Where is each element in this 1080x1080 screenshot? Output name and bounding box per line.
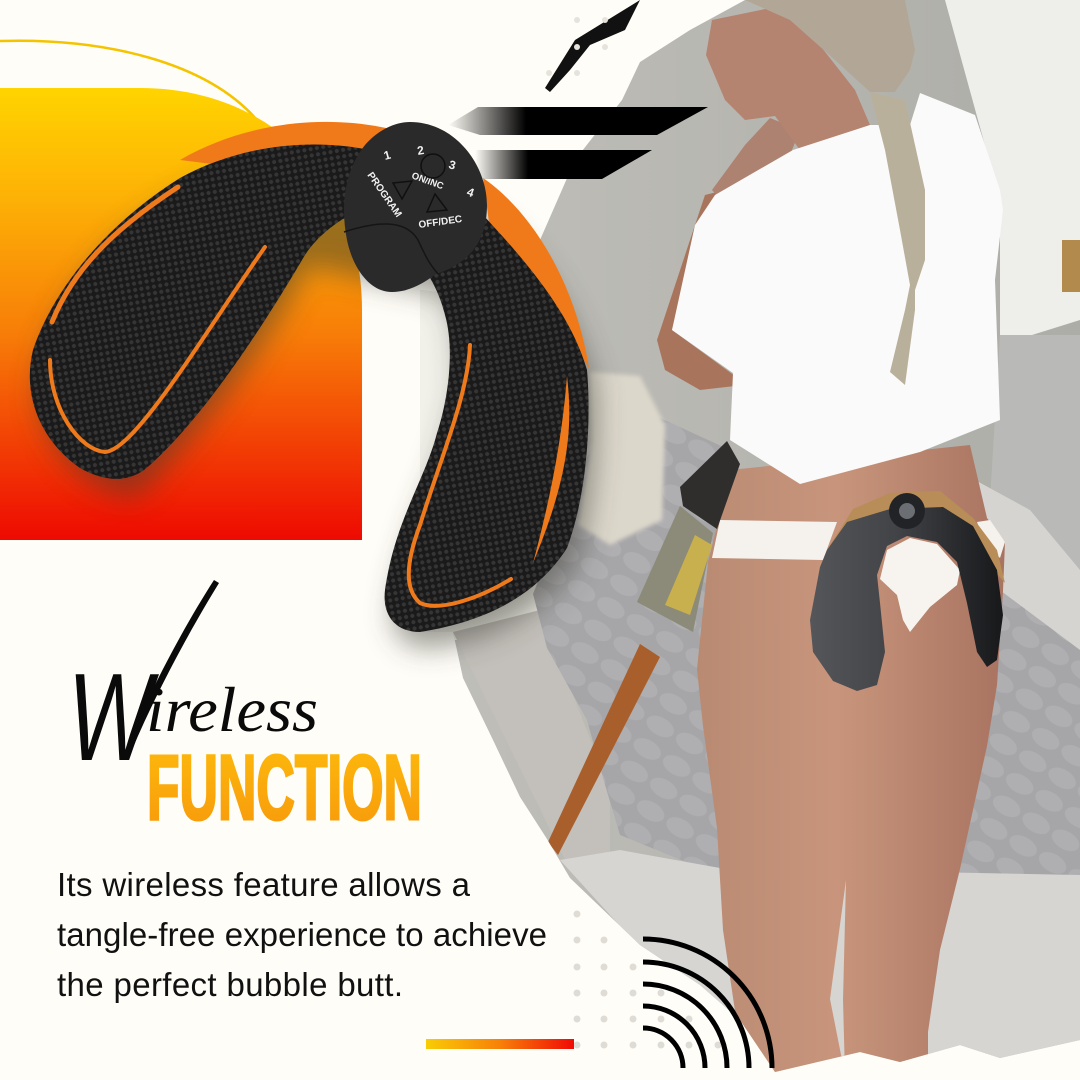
dot grid top — [546, 17, 608, 76]
body text: the perfect bubble butt. — [57, 966, 403, 1003]
body text: Its wireless feature allows a — [57, 866, 471, 903]
orange band right — [483, 178, 589, 368]
photo arm — [657, 190, 735, 390]
script heading: Wireless — [68, 580, 318, 787]
accent gradient bar — [426, 1039, 574, 1049]
script heading: Wireless: W — [68, 649, 159, 787]
photo garment band right — [977, 520, 1005, 558]
left pad — [30, 145, 372, 479]
control hub — [344, 122, 487, 292]
photo vacuum canister — [637, 506, 713, 632]
photo braid — [870, 92, 925, 385]
right pad orange stripe center — [409, 345, 511, 606]
photo pale area beneath product — [420, 290, 538, 640]
orange band left — [180, 122, 395, 170]
brush scratches top — [545, 0, 640, 92]
hub labels — [365, 143, 476, 231]
photo fluffy floor rug — [560, 850, 1080, 1080]
hub labels: ON/INC — [410, 170, 445, 192]
photo garment center — [880, 538, 960, 632]
photo legs and hips — [697, 445, 1005, 1080]
hub labels: 4 — [465, 185, 476, 200]
hub labels: 3 — [447, 157, 458, 173]
photo white shirt — [672, 93, 1003, 484]
hub buttons — [393, 154, 447, 212]
hub labels: PROGRAM — [365, 170, 404, 220]
photo face and neck — [706, 8, 870, 150]
body text: tangle-free experience to achieve — [57, 916, 547, 953]
photo vacuum pole — [548, 644, 660, 855]
body text — [57, 866, 547, 1003]
photo sofa base — [453, 610, 610, 870]
photo fur pillow — [578, 372, 665, 545]
photo hand at shoulder — [712, 118, 795, 194]
photo vacuum head — [680, 441, 740, 529]
photo lower right wall — [991, 335, 1080, 570]
photo knit blanket right — [962, 592, 1080, 875]
photo window frame detail — [1062, 240, 1080, 292]
dot grid bottom — [574, 910, 722, 1048]
photo curtain and window — [945, 0, 1080, 345]
script heading: Wireless: ireless — [146, 674, 318, 745]
hub labels: 1 — [382, 148, 393, 163]
product shadow — [38, 163, 596, 648]
gradient arch panel — [0, 88, 362, 540]
icon: wireless signal arcs — [643, 939, 772, 1068]
left pad orange stripe outer — [52, 187, 178, 322]
hub labels: 2 — [416, 143, 425, 158]
right pad orange stripe edge — [533, 376, 569, 563]
product: wireless muscle stimulator — [30, 122, 589, 632]
right pad — [385, 215, 589, 632]
speed stripes — [448, 107, 708, 179]
photo wearing device — [810, 491, 1005, 691]
left pad orange stripe inner — [50, 247, 265, 452]
photo knit blanket left — [533, 418, 730, 880]
photo gap between legs — [830, 880, 846, 1075]
photo hair — [745, 0, 915, 92]
photo: person using the device — [420, 0, 1080, 1080]
photo wall — [420, 0, 1080, 1080]
photo vacuum label — [665, 535, 712, 615]
hub labels: OFF/DEC — [418, 214, 463, 231]
photo garment band left — [712, 520, 837, 560]
thin yellow curve — [0, 41, 262, 126]
photo sofa right — [975, 480, 1080, 660]
heading: FUNCTION: FUNCTION — [147, 737, 422, 839]
